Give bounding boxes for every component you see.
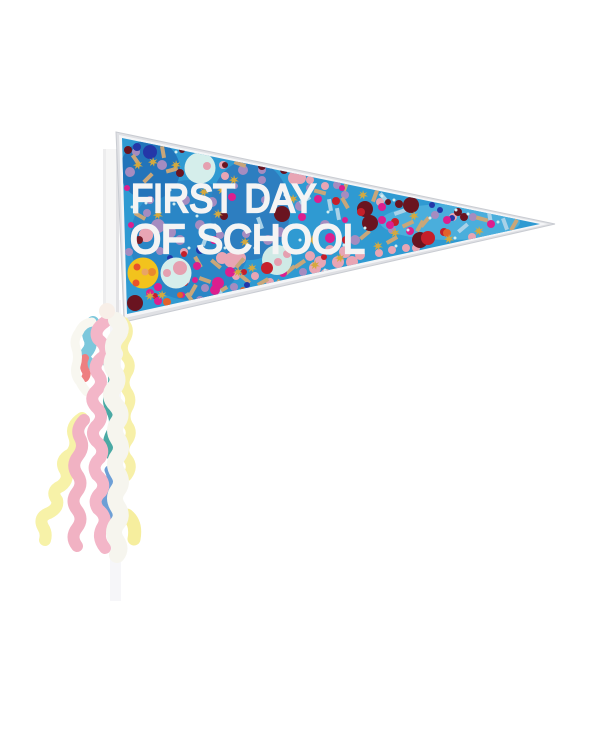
muted discs [125,148,477,304]
heading text: first day of school [130,177,365,262]
tan sequin strips [131,146,519,304]
orange discs [163,229,451,306]
yellow streamer tail right [127,515,135,539]
pennant stitching edge [119,135,548,318]
ribbon streamers [41,303,135,555]
ribbon knot [99,303,115,319]
gold star sequins [133,157,484,301]
pink streamer right [92,322,106,548]
mint circle with pink discs [160,258,192,288]
illustration: first day of school pennant flag [35,132,556,601]
yellow circle [128,258,158,288]
white streamer front [111,320,121,555]
pink streamer left [74,420,84,546]
coral streamer [84,358,86,378]
teal streamer [107,345,114,455]
big mint circle top [184,152,216,184]
magenta discs [124,185,495,305]
blue streamer lower [105,470,112,534]
blue streamer [85,322,93,364]
heading line two: OF SCHOOL [130,216,365,262]
pennant [115,130,555,322]
dark red discs [124,146,468,311]
magenta disc inside the second O [325,233,335,243]
pale blue sequin strips [201,192,509,301]
yellow streamer left [41,418,82,540]
pink disc with dark centre behind the letter O [136,229,153,244]
white loop streamer [75,322,92,392]
flag stick [103,149,121,601]
yellow streamer right [123,322,131,476]
pale mint dots [130,150,500,272]
big mint circle right [261,245,292,275]
confetti field [115,130,545,320]
red discs [152,197,448,299]
navy and blue discs [133,143,455,297]
heading line one: FIRST DAY [131,177,316,221]
pennant border [116,132,555,322]
pink discs [139,161,476,290]
